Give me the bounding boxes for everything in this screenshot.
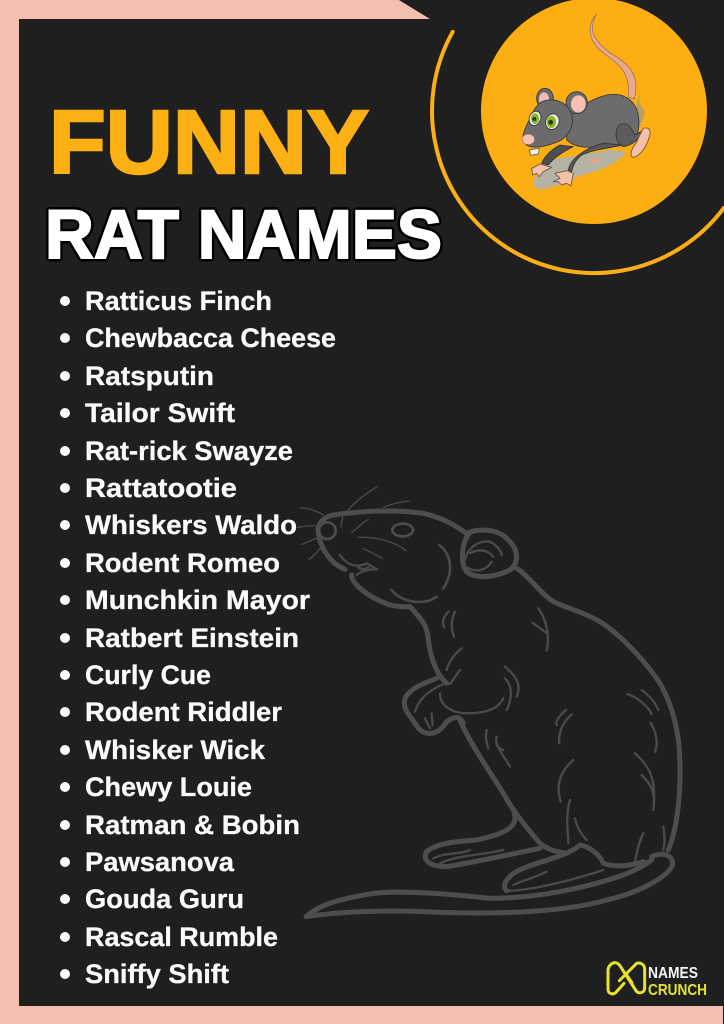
names list: Sniffy Shift [85, 959, 229, 989]
names list: Chewy Louie [85, 772, 252, 802]
head and back [318, 511, 468, 569]
names list: Rattatootie [85, 473, 237, 503]
names list: Curly Cue [85, 660, 211, 690]
names list: Ratticus Finch [85, 286, 272, 316]
names list: Tailor Swift [85, 398, 235, 428]
names list: Rascal Rumble [85, 922, 278, 952]
icon: N logo mark [608, 963, 645, 994]
names list: Munchkin Mayor [85, 585, 311, 615]
names list: Whiskers Waldo [85, 510, 297, 540]
rat tail [590, 14, 636, 99]
title: FUNNY: FUNNY [49, 93, 369, 193]
logo text: NAMES: NAMES [648, 965, 698, 982]
names list: Pawsanova [85, 847, 235, 877]
logo: Names Crunch [608, 963, 707, 999]
eye [392, 524, 413, 536]
decorative ring [432, 32, 724, 273]
logo text: CRUNCH: CRUNCH [648, 982, 707, 999]
icon: running gray rat [522, 14, 650, 189]
names list: Ratbert Einstein [85, 623, 299, 653]
whiskers [297, 487, 409, 559]
names list: Chewbacca Cheese [85, 323, 336, 353]
title: RAT NAMES: RAT NAMES [45, 196, 442, 273]
belly and feet [460, 720, 567, 853]
names list: Rodent Romeo [85, 548, 280, 578]
fur strokes [443, 608, 658, 752]
names list: Rat-rick Swayze [85, 436, 293, 466]
list bullets [60, 296, 70, 979]
background rat outline illustration [297, 487, 680, 917]
names list: Gouda Guru [85, 884, 244, 914]
chest and arm [352, 575, 447, 683]
names list: Ratman & Bobin [85, 810, 300, 840]
names list: Rodent Riddler [85, 697, 282, 727]
names list: Whisker Wick [85, 735, 266, 765]
mouth [340, 555, 377, 575]
title: RAT NAMES: RAT NAMES [45, 196, 442, 273]
tail [306, 854, 673, 917]
names list [60, 286, 336, 989]
orange circle [481, 0, 707, 224]
names list: Ratsputin [85, 361, 214, 391]
